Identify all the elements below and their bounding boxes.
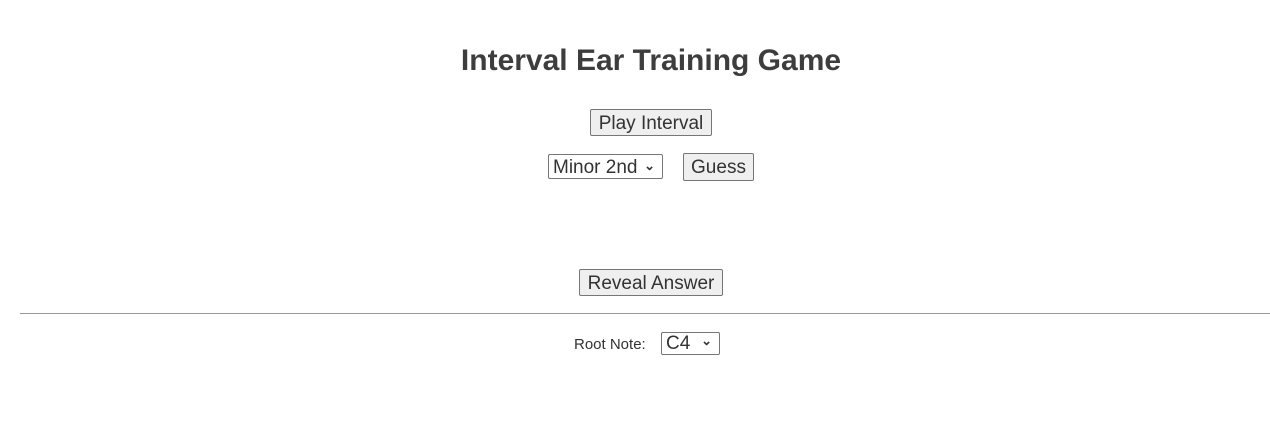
label: root note: Root Note: [574,336,646,353]
title: Interval Ear Training Game [461,44,841,77]
button: reveal answer [579,269,723,296]
dropdown: root note select [661,332,720,355]
dropdown: interval select: Minor 2nd [553,157,638,178]
dropdown: root note select: C4 [666,333,690,354]
dropdown: interval select [548,154,663,179]
button: guess [683,153,754,181]
dropdown: interval select: ⌄ [644,158,655,173]
button: reveal answer: Reveal Answer [588,273,714,294]
button: play interval [590,109,712,136]
button: play interval: Play Interval [599,113,703,134]
button: guess: Guess [691,157,746,178]
dropdown: root note select: ⌄ [701,333,712,348]
